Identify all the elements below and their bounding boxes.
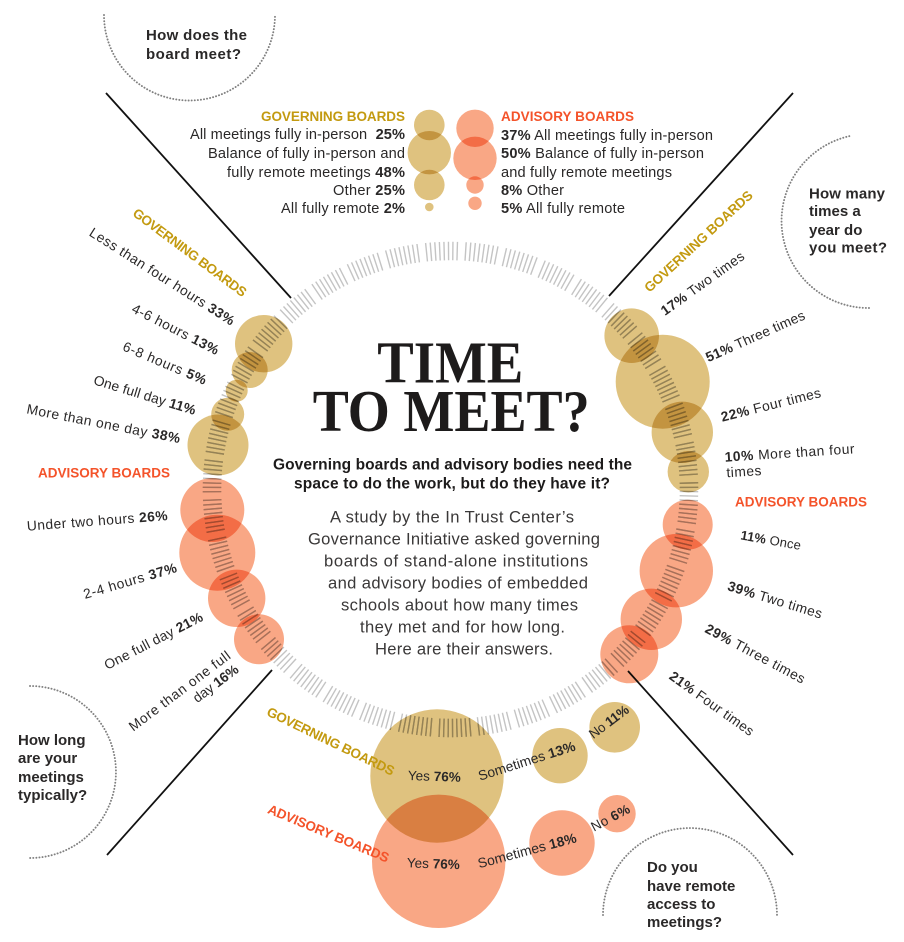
heading: advisory boards: ADVISORY BOARDS: [266, 802, 391, 865]
labels: advisory meeting format: [501, 128, 713, 217]
label: more than one full day: More than one full: [126, 648, 233, 734]
intro text: Governance Initiative asked governing: [308, 530, 600, 549]
labels: governing meeting format: fully remote meetings 48%: [227, 165, 405, 181]
question: how does the board meet: board meet?: [146, 46, 241, 63]
intro text: schools about how many times: [341, 596, 578, 615]
question: how does the board meet: How does the: [146, 27, 247, 44]
panel: how does the board meet: [104, 15, 713, 217]
label: advisory sometimes: Sometimes 18%: [476, 830, 578, 871]
label: four times: 21% Four times: [667, 669, 757, 739]
panel: remote access: [264, 702, 777, 931]
label: more than one day: More than one day 38%: [25, 402, 181, 446]
labels: advisory meeting format: 8% Other: [501, 183, 564, 199]
heading: governing boards: GOVERNING BOARDS: [261, 109, 405, 124]
heading: advisory boards: ADVISORY BOARDS: [38, 465, 170, 480]
label: governing no: No 11%: [586, 702, 632, 742]
labels: advisory meeting format: 50% Balance of fully in-person: [501, 146, 704, 162]
label: one full day: One full day 11%: [92, 373, 198, 418]
subtitle: Governing boards and advisory bodies need the: [273, 456, 632, 473]
label: three times: 51% Three times: [703, 308, 807, 365]
label: governing sometimes: Sometimes 13%: [476, 739, 577, 784]
question: how many times: times a: [809, 203, 861, 220]
label: more than one full day: day 16%: [190, 662, 241, 706]
label: less than four hours: Less than four hours 33%: [87, 225, 237, 328]
tick ring: [212, 251, 689, 728]
label: one full day: One full day 21%: [102, 609, 205, 673]
bubbles: advisory meeting length: [179, 478, 284, 664]
label: more than four times: 10% More than four: [724, 441, 855, 465]
dotted arc: [104, 15, 275, 101]
bubbles: governing boards meeting format: [408, 110, 451, 211]
label: two times: 39% Two times: [726, 579, 824, 622]
question: remote access: Do you: [647, 859, 698, 876]
label: advisory no: No 6%: [588, 801, 632, 834]
bubbles: advisory remote access: [372, 795, 636, 928]
label: advisory yes: Yes 76%: [407, 855, 460, 872]
dotted arc: [30, 686, 116, 858]
question: how many times: you meet?: [809, 240, 887, 257]
bubbles: advisory meetings per year: [600, 500, 713, 683]
dotted arc: [782, 136, 869, 308]
heading: governing boards: GOVERNING BOARDS: [641, 188, 756, 295]
labels: governing meeting format: Balance of fully in-person and: [208, 146, 405, 162]
panel: how long are your meetings: [18, 205, 292, 858]
intro text: and advisory bodies of embedded: [328, 574, 588, 593]
labels: advisory meeting format: 37% All meetings fully in-person: [501, 128, 713, 144]
heading: governing boards: GOVERNING BOARDS: [130, 205, 250, 300]
label: two times: 17% Two times: [658, 249, 747, 318]
question: remote access: have remote: [647, 878, 735, 895]
label: four times: 22% Four times: [719, 385, 823, 425]
bubbles: governing meeting length: [188, 315, 292, 476]
label: 2-4 hours: 2-4 hours 37%: [82, 560, 179, 602]
labels: advisory meeting format: 5% All fully remote: [501, 201, 625, 217]
label: more than four times: [724, 441, 855, 480]
label: more than four times: times: [726, 463, 762, 480]
bubbles: governing remote access: [370, 702, 640, 843]
labels: governing meeting format: All meetings fully in-person 25%: [190, 127, 405, 143]
label: 4-6 hours: 4-6 hours 13%: [129, 301, 221, 358]
label: three times: 29% Three times: [703, 621, 808, 687]
label: 6-8 hours: 6-8 hours 5%: [121, 339, 209, 388]
labels: governing meeting format: Other 25%: [333, 183, 405, 199]
intro text: Here are their answers.: [375, 640, 553, 659]
question: how long: typically?: [18, 787, 87, 804]
subtitle: [273, 456, 632, 492]
heading: advisory boards: ADVISORY BOARDS: [501, 109, 634, 124]
dotted arc: [603, 828, 777, 915]
label: governing yes: Yes 76%: [408, 768, 461, 785]
question: how long: are your: [18, 750, 77, 767]
title: TIME: [377, 329, 523, 395]
subtitle: space to do the work, but do they have it?: [294, 475, 610, 492]
question: how many times: How many: [809, 185, 886, 202]
dividing lines: [106, 93, 793, 855]
question: remote access: access to: [647, 896, 715, 913]
heading: governing boards: GOVERNING BOARDS: [264, 704, 397, 779]
panel: how many times a year: [600, 136, 887, 739]
question: how long: meetings: [18, 769, 84, 786]
intro text: [308, 508, 600, 659]
labels: governing meeting format: [190, 127, 405, 217]
intro text: A study by the In Trust Center’s: [330, 508, 574, 527]
intro text: they met and for how long.: [360, 618, 565, 637]
labels: advisory meeting format: and fully remote meetings: [501, 165, 672, 181]
title: TO MEET?: [313, 378, 590, 444]
intro text: boards of stand-alone institutions: [324, 552, 588, 571]
question: how long: How long: [18, 732, 86, 749]
labels: governing meeting format: All fully remote 2%: [281, 201, 405, 217]
heading: advisory boards: ADVISORY BOARDS: [735, 495, 867, 510]
label: once: 11% Once: [739, 527, 802, 553]
label: under two hours: Under two hours 26%: [26, 508, 168, 534]
bubbles: governing meetings per year: [604, 308, 713, 492]
question: remote access: meetings?: [647, 914, 722, 931]
question: how many times: year do: [809, 222, 862, 239]
bubbles: advisory boards meeting format: [453, 110, 497, 210]
title: [313, 329, 590, 444]
